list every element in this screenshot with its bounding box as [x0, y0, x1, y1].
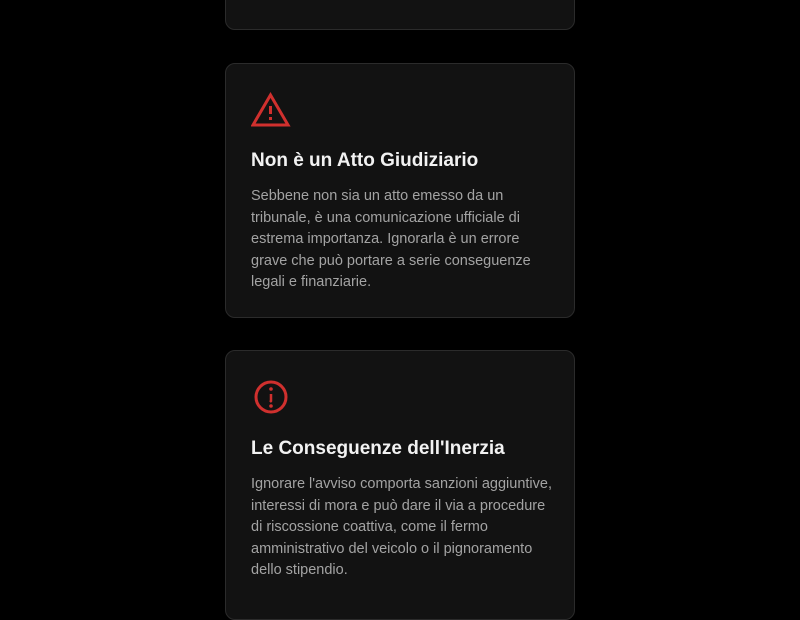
text block: legali e finanziarie. [251, 274, 371, 290]
text block: interessi di mora e può dare il via a procedure [251, 498, 545, 514]
panel: conseguenze [225, 350, 575, 620]
text block: dello stipendio. [251, 562, 348, 578]
text block [251, 188, 531, 290]
icon: warning triangle [251, 92, 290, 126]
text block: tribunale, è una comunicazione ufficiale di [251, 210, 520, 226]
heading: Le Conseguenze dell'Inerzia [251, 438, 505, 459]
panel: non atto giudiziario [225, 63, 575, 318]
text block [251, 476, 552, 578]
panel: previous card [225, 0, 575, 30]
heading: Non è un Atto Giudiziario [251, 150, 478, 171]
text block: di riscossione coattiva, come il fermo [251, 519, 488, 535]
text block: estrema importanza. Ignorarla è un errore [251, 231, 519, 247]
text block: Ignorare l'avviso comporta sanzioni aggiuntive, [251, 476, 552, 492]
text block: Sebbene non sia un atto emesso da un [251, 188, 503, 204]
text block: amministrativo del veicolo o il pignoramento [251, 541, 532, 557]
text block: grave che può portare a serie conseguenze [251, 253, 531, 269]
icon: info circle [254, 380, 288, 414]
